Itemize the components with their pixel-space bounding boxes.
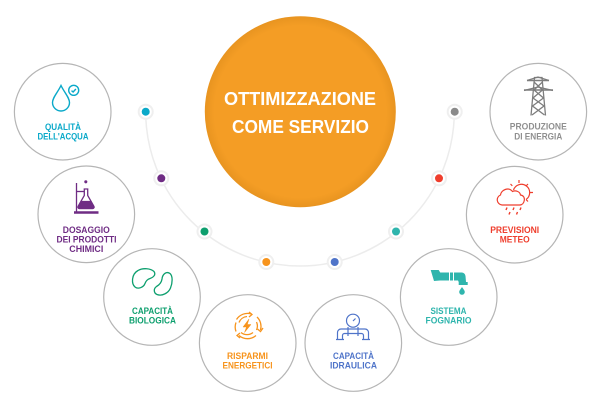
- label: [490, 225, 539, 246]
- node: orange: [259, 255, 273, 269]
- label: RISPARMI: [227, 351, 268, 362]
- node: red: [432, 171, 446, 185]
- icon: pylon: [524, 77, 553, 116]
- panel: biological capacity: [104, 249, 200, 345]
- icon: lightning in recycling arrows: [235, 312, 263, 339]
- label: DEI PRODOTTI: [56, 235, 117, 246]
- label: PRODUZIONE: [510, 122, 567, 133]
- label: BIOLOGICA: [129, 316, 176, 327]
- label: IDRAULICA: [330, 361, 377, 372]
- label: [330, 350, 377, 372]
- node: blue: [328, 255, 342, 269]
- label: DELL'ACQUA: [38, 132, 89, 142]
- icon: dripping pipe: [431, 270, 468, 295]
- label: [129, 305, 176, 327]
- panel: sewer system: [400, 249, 497, 345]
- label: [56, 225, 117, 255]
- panel: energy savings: [199, 295, 296, 391]
- central circle: title: [205, 16, 396, 207]
- label: DI ENERGIA: [514, 131, 562, 142]
- label: CAPACITÀ: [333, 350, 374, 362]
- label: [426, 306, 472, 327]
- central circle: title: COME SERVIZIO: [232, 117, 369, 137]
- label: ENERGETICI: [222, 361, 273, 372]
- icon: pipe with gauge: [336, 314, 370, 340]
- icon: water drop with check: [52, 85, 79, 111]
- label: PREVISIONI: [490, 225, 539, 236]
- icon: cloud sun rain: [497, 180, 533, 214]
- panel: water quality: [14, 63, 111, 160]
- label: [222, 351, 273, 372]
- label: [510, 122, 567, 142]
- node: green: [198, 224, 212, 238]
- label: METEO: [500, 235, 530, 246]
- central circle: title: OTTIMIZZAZIONE: [224, 89, 376, 109]
- label: FOGNARIO: [426, 316, 472, 327]
- icon: flask on stand: [74, 181, 98, 212]
- node: purple: [154, 171, 168, 185]
- node: grey: [448, 105, 462, 119]
- connecting arc: [146, 112, 454, 266]
- panel: chemical dosing: [38, 166, 135, 263]
- node: turquoise: [389, 224, 403, 238]
- label: SISTEMA: [430, 306, 467, 317]
- label: [38, 121, 89, 142]
- panel: energy production: [490, 63, 587, 160]
- icon: two bacteria: [133, 269, 172, 295]
- label: QUALITÀ: [45, 121, 81, 133]
- label: CHIMICI: [69, 244, 104, 255]
- label: DOSAGGIO: [63, 225, 110, 236]
- panel: hydraulic capacity: [305, 295, 402, 391]
- panel: weather forecast: [466, 166, 563, 263]
- node: teal: [139, 105, 153, 119]
- label: CAPACITÀ: [132, 305, 173, 317]
